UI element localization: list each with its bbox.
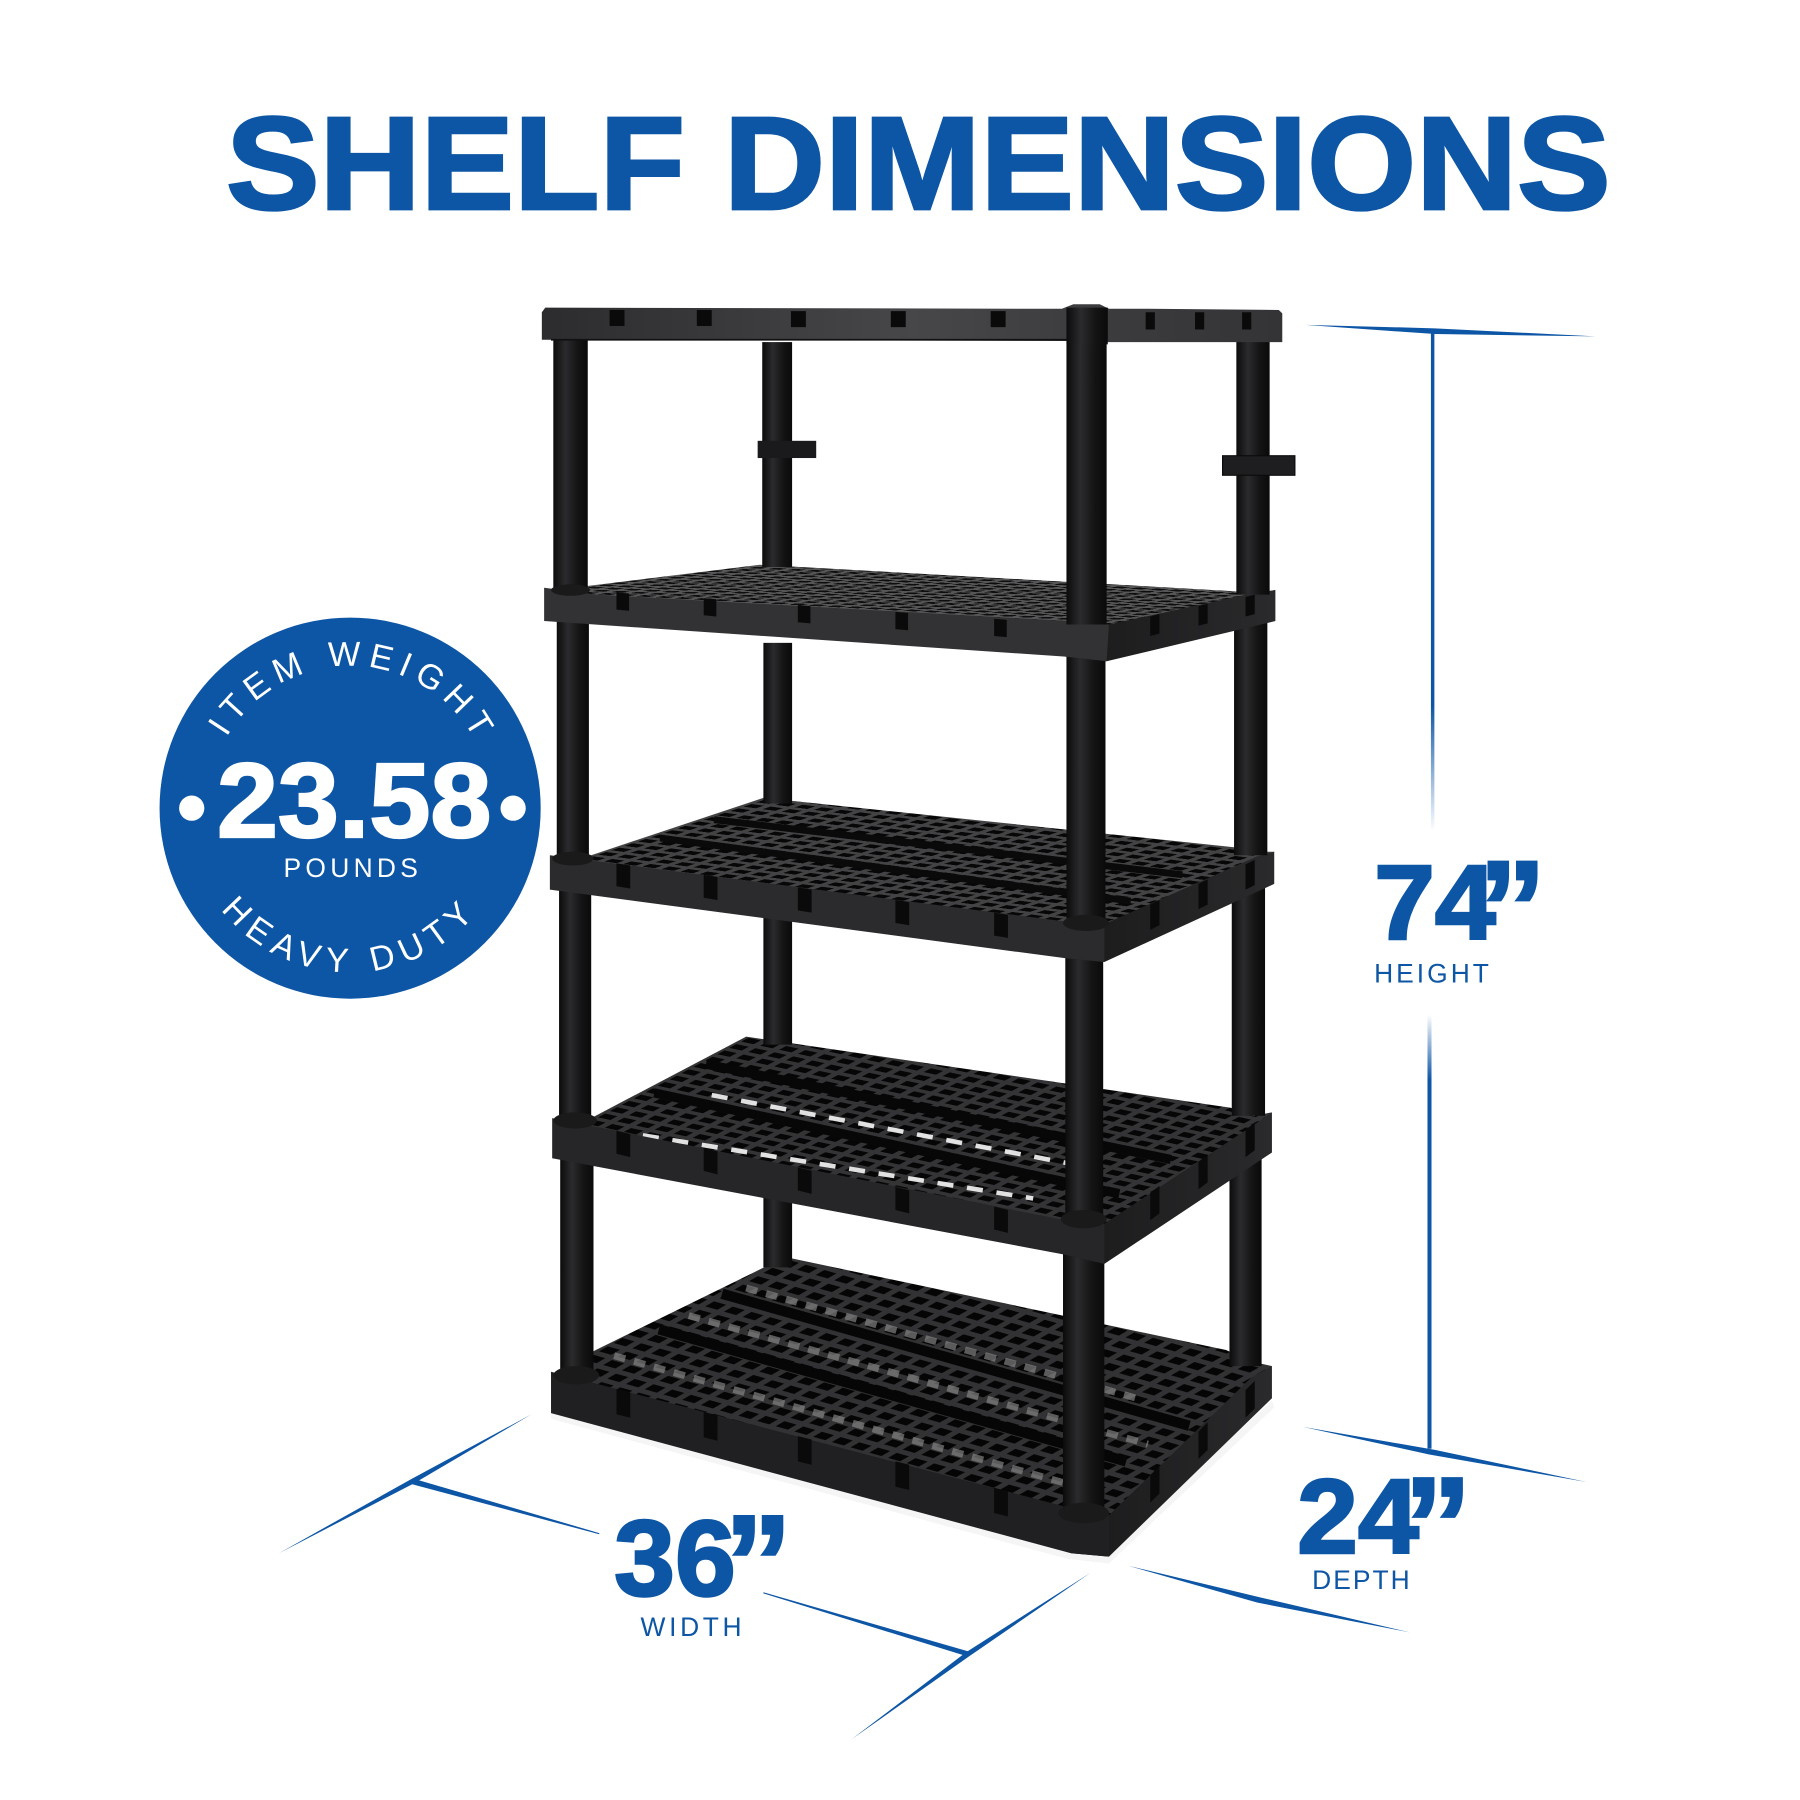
upper line: [1431, 331, 1434, 831]
depth dimension: [1128, 1449, 1472, 1632]
bottom tick: [1303, 1427, 1586, 1482]
clip on back right post: [1223, 456, 1295, 475]
badge circle: [160, 618, 541, 999]
weight value: 23.58: [217, 742, 491, 860]
title: SHELF DIMENSIONS: [226, 89, 1611, 237]
heavy duty curved text: HEAVY DUTY: [222, 896, 468, 972]
width dimension: [279, 1414, 1091, 1739]
width value: ”: [724, 1486, 792, 1638]
height label: HEIGHT: [1374, 959, 1489, 989]
clip on back left post: [758, 441, 816, 458]
posts: fourth to third shelf: [553, 872, 1265, 1228]
posts: second to top shelf: [551, 340, 1270, 624]
width value: 36: [614, 1498, 736, 1619]
posts: third to second shelf: [552, 614, 1267, 931]
width label: WIDTH: [641, 1612, 742, 1642]
depth line: [1128, 1566, 1410, 1632]
top tick: [1305, 325, 1596, 336]
right dot: [501, 796, 526, 821]
height value: ”: [1479, 832, 1546, 984]
pounds label: POUNDS: [284, 853, 418, 883]
height value: 74: [1374, 844, 1496, 962]
depth value: 24: [1297, 1458, 1419, 1576]
third shelf: [550, 798, 1274, 962]
base shelf: [551, 1257, 1274, 1564]
top shelf: [542, 304, 1282, 344]
left tick: [279, 1414, 532, 1553]
item weight curved text: ITEM WEIGHT: [208, 642, 494, 735]
posts: base to fourth shelf: [553, 1131, 1262, 1523]
depth label: DEPTH: [1312, 1565, 1410, 1595]
second shelf: [544, 565, 1275, 661]
product photo: five-tier black plastic shelf unit: [542, 304, 1295, 1564]
height dimension: [1303, 325, 1596, 1482]
right tick: [852, 1573, 1091, 1739]
weight badge: [160, 618, 541, 999]
left dot: [179, 796, 204, 821]
left line: [412, 1479, 599, 1534]
right line: [763, 1592, 970, 1657]
depth value: ”: [1404, 1449, 1472, 1601]
lower line: [1427, 1015, 1432, 1449]
fourth shelf: [552, 1037, 1272, 1264]
